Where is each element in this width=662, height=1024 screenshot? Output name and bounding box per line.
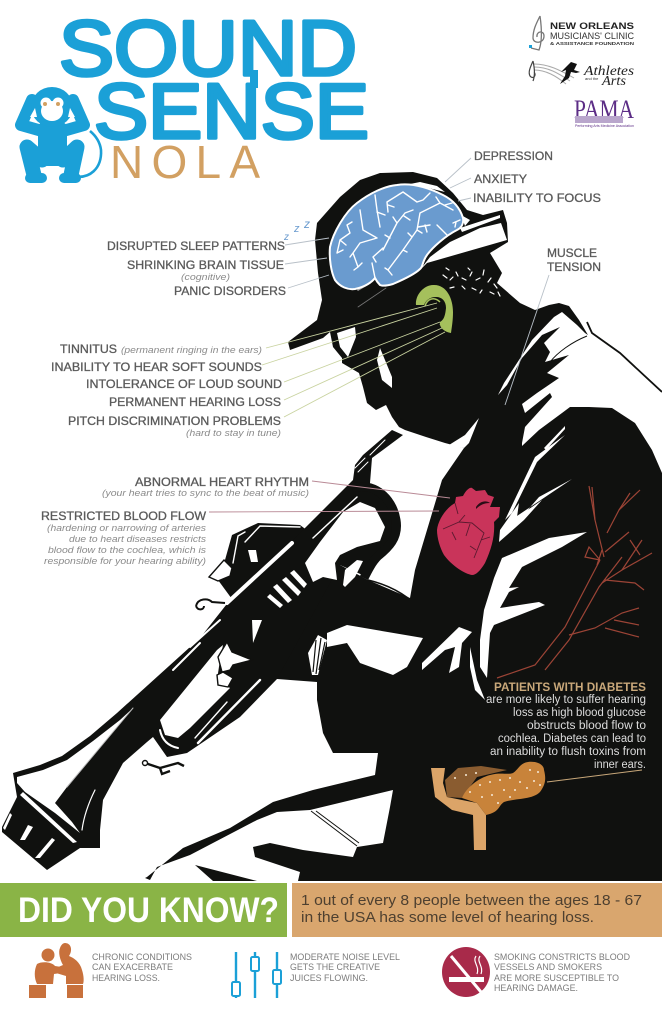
label: mental health effects bbox=[473, 149, 601, 205]
icon: sleep z-z-z: z bbox=[303, 217, 310, 231]
label: mental health effects: ANXIETY bbox=[474, 172, 527, 186]
label: hearing effects: INABILITY TO HEAR SOFT SOUNDS bbox=[51, 360, 262, 374]
label: muscle tension: TENSION bbox=[547, 260, 601, 274]
panel: did you know bbox=[0, 883, 287, 937]
logo: Athletes and the Arts bbox=[529, 61, 634, 88]
label: heart effects: responsible for your hearing ability) bbox=[44, 556, 206, 567]
white trumpet and clothing highlights bbox=[3, 182, 587, 858]
heart leader lines bbox=[209, 481, 450, 512]
brain and muscle leader lines bbox=[285, 158, 549, 405]
icon: doctor and patient bbox=[29, 943, 84, 998]
label: heart effects: RESTRICTED BLOOD FLOW bbox=[41, 509, 207, 523]
text block: patients with diabetes: are more likely to suffer hearing bbox=[486, 694, 646, 706]
text: smoking: ARE MORE SUSCEPTIBLE TO bbox=[494, 973, 619, 984]
label: sleep, brain tissue, panic: SHRINKING BRAIN TISSUE bbox=[127, 258, 284, 272]
text block: patients with diabetes: PATIENTS WITH DIABETES bbox=[494, 680, 646, 694]
text block: patients with diabetes bbox=[486, 680, 646, 771]
label: heart effects: due to heart diseases restricts bbox=[69, 534, 206, 545]
text: moderate noise level: MODERATE NOISE LEVEL bbox=[290, 952, 400, 963]
text: chronic conditions: CAN EXACERBATE bbox=[92, 962, 173, 973]
title: Sound Sense NOLA: SOUND bbox=[59, 4, 357, 92]
label: hearing effects: TINNITUS bbox=[60, 342, 117, 356]
musician silhouette with trumpet bbox=[2, 172, 662, 881]
label: mental health effects: INABILITY TO FOCUS bbox=[473, 191, 601, 205]
text: chronic conditions: CHRONIC CONDITIONS bbox=[92, 952, 192, 963]
text: smoking bbox=[494, 952, 630, 994]
text: smoking: VESSELS AND SMOKERS bbox=[494, 962, 602, 973]
icon: ear bbox=[416, 285, 453, 333]
logo: New Orleans Musicians' Clinic: MUSICIANS' CLINIC bbox=[550, 31, 634, 42]
label: hearing effects: (hard to stay in tune) bbox=[186, 428, 281, 439]
panel: hearing loss statistic: in the USA has some level of hearing loss. bbox=[301, 910, 594, 926]
title: Sound Sense NOLA: NOLA bbox=[110, 136, 260, 188]
panel: did you know: DID YOU KNOW? bbox=[18, 891, 279, 930]
label: heart effects: (your heart tries to sync to the beat of music) bbox=[102, 488, 309, 499]
icon: no smoking bbox=[442, 947, 490, 997]
icon: monkey covering ears bbox=[21, 87, 101, 178]
label: hearing effects: PERMANENT HEARING LOSS bbox=[109, 395, 281, 409]
trumpet tuning loop bbox=[352, 487, 397, 578]
label: sleep, brain tissue, panic bbox=[107, 239, 286, 298]
text block: patients with diabetes: loss as high blood glucose bbox=[513, 707, 646, 719]
text: chronic conditions bbox=[92, 952, 192, 984]
logo: Athletes and the Arts: and the bbox=[585, 76, 599, 81]
silhouette: wedge at lower left bbox=[195, 865, 257, 881]
label: hearing effects: (permanent ringing in the ears) bbox=[121, 345, 262, 356]
label: sleep, brain tissue, panic: (cognitive) bbox=[181, 272, 230, 283]
silhouette: trumpet bbox=[2, 430, 403, 870]
label: sleep, brain tissue, panic: PANIC DISORDERS bbox=[174, 284, 286, 298]
neck hair specks bbox=[443, 268, 500, 296]
text block: patients with diabetes: an inability to flush toxins from bbox=[490, 746, 646, 758]
label: muscle tension bbox=[547, 246, 601, 274]
logo: PAMA: Performing Arts Medicine Association bbox=[575, 124, 634, 128]
text: smoking: HEARING DAMAGE. bbox=[494, 983, 578, 994]
logo: Athletes and the Arts: Arts bbox=[601, 73, 626, 88]
panel: hearing loss statistic bbox=[292, 883, 662, 937]
title: Sound Sense NOLA: SENSE bbox=[94, 67, 369, 155]
logo: Athletes and the Arts: Athletes bbox=[583, 63, 634, 78]
logo: New Orleans Musicians' Clinic: NEW ORLEANS bbox=[550, 21, 634, 32]
brain folds bbox=[337, 192, 460, 278]
label: sleep, brain tissue, panic: DISRUPTED SLEEP PATTERNS bbox=[107, 239, 285, 253]
text: moderate noise level: JUICES FLOWING. bbox=[290, 973, 368, 984]
icon: heart bbox=[437, 488, 500, 575]
text: chronic conditions: HEARING LOSS. bbox=[92, 973, 160, 984]
icon: sleep z-z-z bbox=[283, 217, 310, 243]
label: mental health effects: DEPRESSION bbox=[474, 149, 553, 163]
label: muscle tension: MUSCLE bbox=[547, 246, 597, 260]
trumpet line details bbox=[67, 283, 386, 830]
icon: sliders bbox=[232, 952, 281, 998]
text block: patients with diabetes: cochlea. Diabetes can lead to bbox=[498, 733, 646, 745]
brain bbox=[330, 184, 463, 289]
label: hearing effects: INTOLERANCE OF LOUD SOUND bbox=[86, 377, 282, 391]
panel: hearing loss statistic: 1 out of every 8 people between the ages 18 - 67 bbox=[301, 893, 642, 909]
icon: pancreas bbox=[431, 762, 642, 850]
label: hearing effects: PITCH DISCRIMINATION PROBLEMS bbox=[68, 414, 281, 428]
collar line and shirt detail bbox=[311, 322, 662, 846]
logo: New Orleans Musicians' Clinic bbox=[529, 16, 635, 50]
ear leader lines bbox=[262, 303, 445, 417]
label: heart effects bbox=[41, 475, 309, 567]
icon: blood vessels bbox=[497, 486, 652, 678]
text block: patients with diabetes: inner ears. bbox=[594, 759, 646, 771]
label: heart effects: ABNORMAL HEART RHYTHM bbox=[135, 475, 309, 489]
logo: New Orleans Musicians' Clinic: & ASSISTANCE FOUNDATION bbox=[550, 41, 635, 46]
label: heart effects: blood flow to the cochlea, which is bbox=[48, 545, 206, 556]
pancreas dots bbox=[454, 769, 541, 804]
label: heart effects: (hardening or narrowing of arteries bbox=[47, 523, 206, 534]
fingers and valve details bbox=[142, 560, 252, 774]
label: hearing effects bbox=[51, 342, 282, 439]
silhouette: man body bbox=[145, 172, 662, 881]
text: moderate noise level: GETS THE CREATIVE bbox=[290, 962, 380, 973]
icon: sleep z-z-z: z bbox=[283, 232, 289, 243]
title: Sound Sense NOLA bbox=[59, 4, 369, 188]
text block: patients with diabetes: obstructs blood flow to bbox=[527, 720, 646, 732]
icon: sleep z-z-z: z bbox=[293, 223, 300, 235]
logo: PAMA: PAMA bbox=[574, 95, 634, 124]
text: smoking: SMOKING CONSTRICTS BLOOD bbox=[494, 952, 630, 963]
text: moderate noise level bbox=[290, 952, 400, 984]
